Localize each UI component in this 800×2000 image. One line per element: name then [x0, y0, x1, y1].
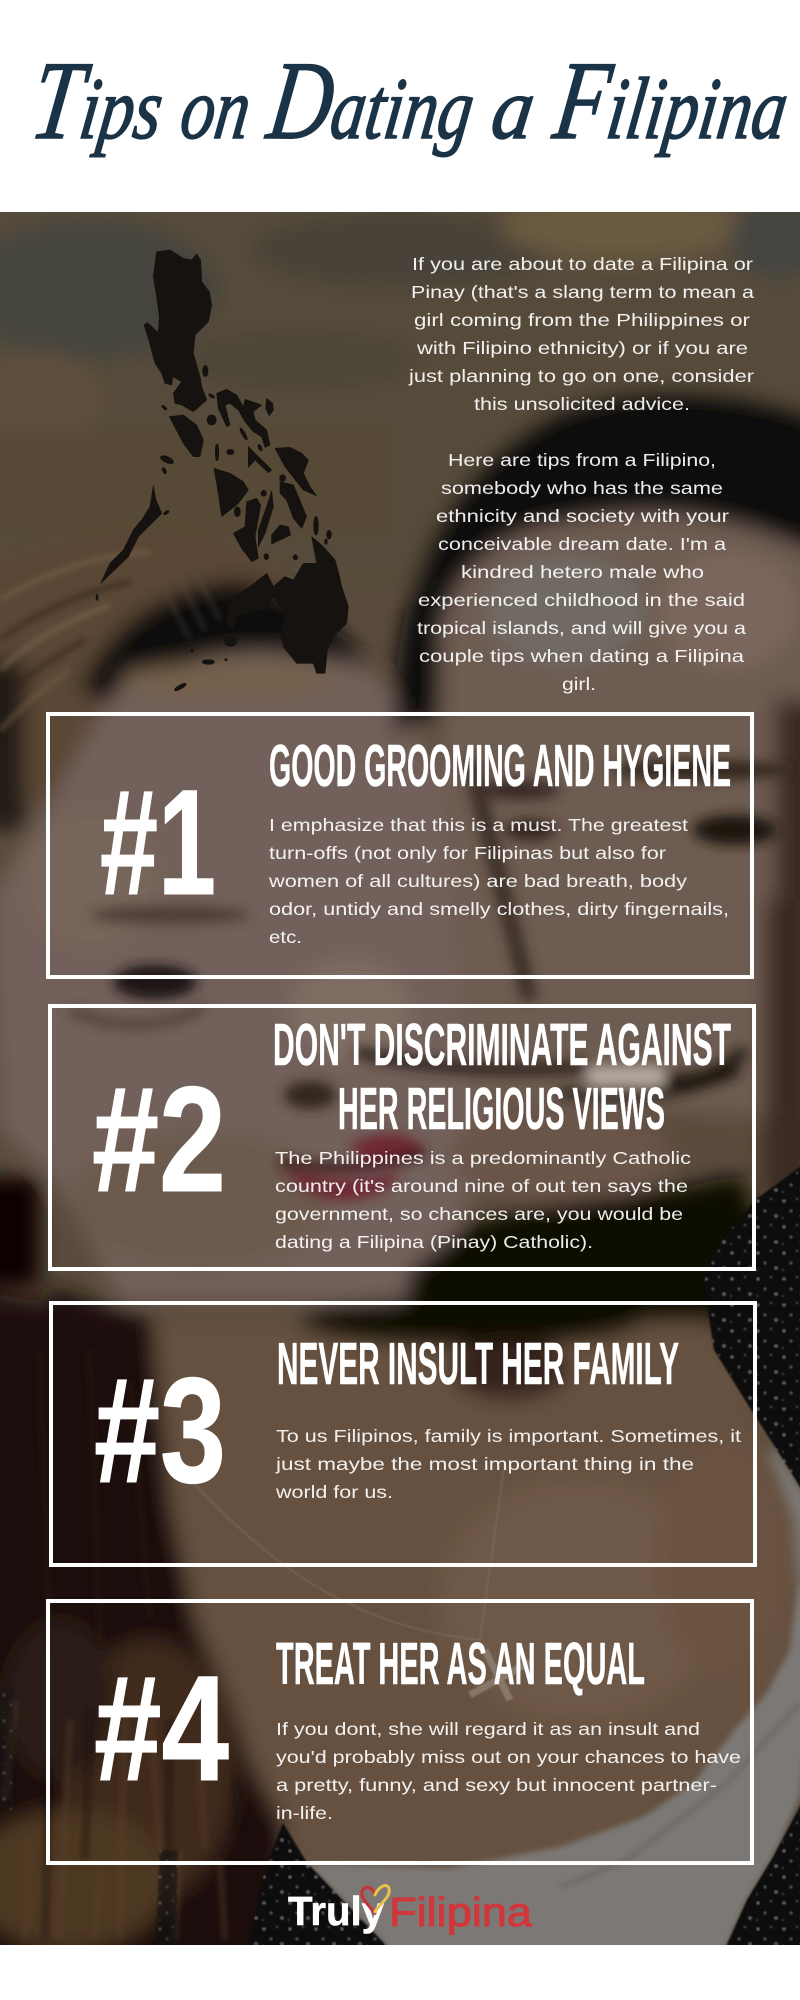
strap upper strip	[767, 1450, 800, 1583]
intro text: this unsolicited advice.	[474, 394, 690, 414]
man's cheek right	[765, 900, 800, 1200]
icon: heart	[362, 1886, 389, 1913]
body 2: The Philippines is a predominantly Catholic	[275, 1148, 691, 1168]
body 3: just maybe the most important thing in the	[275, 1454, 694, 1474]
man's forehead and face	[440, 512, 800, 1120]
intro text: Here are tips from a Filipino,	[448, 450, 716, 470]
nose and shadows	[284, 1081, 336, 1109]
heading 2	[273, 1012, 731, 1142]
body 2: government, so chances are, you would be	[275, 1204, 683, 1224]
chest	[153, 1322, 800, 1880]
body 4: in-life.	[276, 1803, 333, 1823]
intro text: girl.	[562, 674, 596, 694]
intro text: kindred hetero male who	[461, 562, 704, 582]
logo: TrulyFilipina: Truly	[288, 1888, 384, 1934]
body 4: a pretty, funny, and sexy but innocent partner-	[276, 1775, 717, 1795]
number 1: #1	[100, 758, 216, 926]
panel: tip 1	[48, 714, 752, 977]
body 1: turn-offs (not only for Filipinas but also for	[269, 843, 666, 863]
body 4	[276, 1719, 741, 1823]
divider of faces	[420, 610, 428, 720]
body 1	[268, 815, 729, 947]
body 4: If you dont, she will regard it as an insult and	[276, 1719, 700, 1739]
dress	[704, 1160, 800, 1495]
number 2: #2	[92, 1055, 226, 1223]
body 2: country (it's around nine of out ten says the	[275, 1176, 688, 1196]
man's hair	[395, 390, 800, 740]
intro text: just planning to go on one, consider	[408, 366, 754, 386]
intro text: experienced childhood in the said	[418, 590, 745, 610]
title: Tips	[25, 39, 172, 163]
man's brow and eye	[610, 760, 790, 780]
title: on	[175, 60, 257, 158]
body 2	[275, 1148, 691, 1252]
intro text: with Filipino ethnicity) or if you are	[416, 338, 748, 358]
panel: tip 4	[48, 1601, 752, 1863]
number 4: #4	[94, 1644, 229, 1812]
hair streaks	[0, 552, 240, 1940]
intro text: girl coming from the Philippines or	[414, 310, 750, 330]
left hair near face	[0, 660, 25, 830]
panel: tip 3	[51, 1303, 755, 1565]
strap seam	[560, 1703, 800, 1887]
intro text: tropical islands, and will give you a	[417, 618, 746, 638]
intro text: couple tips when dating a Filipina	[419, 646, 744, 666]
body 1: etc.	[269, 927, 302, 947]
white top strap	[307, 1583, 800, 1960]
woman's hair	[0, 529, 400, 800]
intro text: If you are about to date a Filipina or	[412, 254, 753, 274]
number 3: #3	[94, 1346, 226, 1514]
body 3: To us Filipinos, family is important. Sometimes, it	[276, 1426, 741, 1446]
body 3: world for us.	[275, 1482, 393, 1502]
intro text: Pinay (that's a slang term to mean a	[411, 282, 754, 302]
intro text: somebody who has the same	[441, 478, 723, 498]
intro text: ethnicity and society with your	[436, 506, 729, 526]
man's chin	[450, 1105, 670, 1205]
sky tones	[281, 382, 800, 616]
title: Dating	[260, 39, 483, 163]
left long hair	[0, 1290, 283, 1980]
body 1: odor, untidy and smelly clothes, dirty fingernails,	[269, 899, 729, 919]
panel: tip 2	[50, 1006, 754, 1269]
woman's brow and eye	[90, 906, 250, 924]
body 2: dating a Filipina (Pinay) Catholic).	[275, 1232, 593, 1252]
necklace cross	[470, 1650, 530, 1700]
body 1: women of all cultures) are bad breath, body	[268, 871, 687, 891]
logo: TrulyFilipina	[288, 1886, 532, 1935]
title	[25, 39, 797, 163]
body 3	[275, 1426, 741, 1502]
woman's forehead and face	[0, 653, 504, 1302]
lips	[350, 1134, 425, 1161]
necklace	[190, 1460, 505, 1640]
intro text: conceivable dream date. I'm a	[438, 534, 726, 554]
man's smile	[587, 1066, 665, 1086]
body 4: you'd probably miss out on your chances to have	[276, 1747, 741, 1767]
body 1: I emphasize that this is a must. The greatest	[269, 815, 688, 835]
map of the Philippines	[96, 250, 348, 692]
title: a	[486, 60, 541, 158]
logo: TrulyFilipina: Filipina	[389, 1889, 532, 1935]
dark jaw and neck shadow	[400, 1175, 770, 1345]
intro text	[408, 254, 754, 694]
